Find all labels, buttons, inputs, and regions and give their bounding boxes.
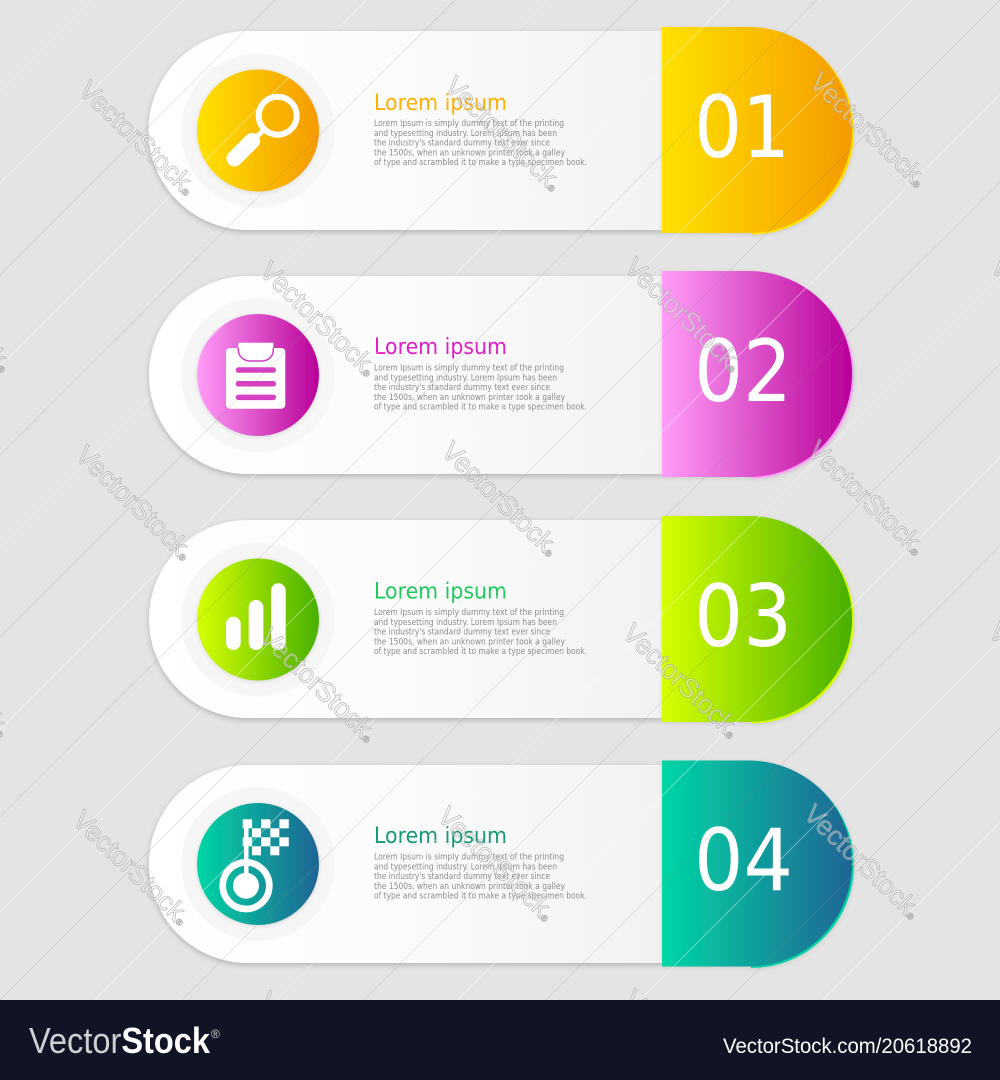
body text 04 [374, 852, 587, 902]
number 03: 03 [694, 567, 792, 667]
body text 03 [374, 608, 587, 657]
body text 02 [374, 364, 587, 412]
body text 03: of type and scrambled it to make a type specimen book. [374, 647, 587, 657]
watermark lines and stamps: VectorStock® [436, 436, 565, 562]
card 03 [149, 520, 662, 718]
panel: step 01 [149, 27, 854, 234]
watermark lines and stamps: VectorStock® [804, 67, 933, 193]
body text 04: the industry's standard dummy text ever since [374, 872, 550, 882]
panel: step 04 [149, 760, 854, 968]
icon disc 02 [197, 314, 319, 436]
icon disc 01 [197, 70, 319, 192]
icon disc 03 [197, 558, 319, 680]
body text 04: the 1500s, when an unknown printer took a galley [374, 882, 565, 892]
number 02: 02 [694, 322, 792, 422]
icon ring 01 [181, 54, 335, 208]
number 04: 04 [694, 811, 793, 911]
footer logo: VectorStock [29, 1020, 211, 1061]
body text 01: of type and scrambled it to make a type specimen book. [374, 158, 587, 168]
body text 01: Lorem Ipsum is simply dummy text of the printing [374, 119, 564, 129]
number 01: 01 [694, 78, 790, 178]
watermark lines and stamps: VectorStock® [70, 440, 199, 566]
body text 04: Lorem Ipsum is simply dummy text of the printing [374, 852, 564, 862]
icon: target with checkered flag [223, 819, 289, 909]
tab 01 [662, 27, 854, 234]
body text 03: the 1500s, when an unknown printer took a galley [374, 638, 565, 648]
body text 02: the 1500s, when an unknown printer took a galley [374, 393, 565, 403]
watermark lines and stamps: VectorStock® [802, 435, 931, 561]
body text 01: the industry's standard dummy text ever since [374, 138, 550, 148]
watermark lines and stamps: VectorStock® [73, 75, 202, 201]
card 02 [149, 276, 662, 474]
icon: bar chart [226, 583, 286, 650]
heading 04: Lorem ipsum [374, 824, 507, 849]
body text 04: and typesetting industry. Lorem Ipsum has been [374, 862, 557, 872]
watermark lines and stamps: VectorStock® [617, 618, 746, 744]
watermark lines and stamps: VectorStock® [67, 805, 196, 931]
body text 02: the industry's standard dummy text ever since [374, 383, 550, 393]
body text 01: the 1500s, when an unknown printer took a galley [374, 148, 565, 158]
body text 03: Lorem Ipsum is simply dummy text of the printing [374, 608, 564, 618]
footer image id: VectorStock.com/20618892 [723, 1035, 972, 1058]
body text 02: and typesetting industry. Lorem Ipsum has been [374, 374, 557, 384]
footer bar [0, 1000, 1000, 1080]
watermark lines and stamps: VectorStock® [254, 622, 383, 748]
body text 01 [374, 119, 587, 168]
icon disc 04 [197, 803, 319, 925]
heading 01: Lorem ipsum [374, 91, 507, 116]
icon ring 04 [181, 787, 335, 941]
tab 04 [662, 760, 854, 968]
footer registered mark: ® [211, 1027, 220, 1041]
icon: clipboard [226, 343, 285, 409]
body text 04: of type and scrambled it to make a type specimen book. [374, 892, 587, 902]
body text 03: and typesetting industry. Lorem Ipsum has been [374, 618, 557, 628]
card 04 [149, 765, 662, 963]
watermark lines and stamps: VectorStock® [798, 799, 927, 925]
body text 03: the industry's standard dummy text ever since [374, 628, 550, 638]
heading 02: Lorem ipsum [374, 335, 507, 360]
icon: magnifier [234, 97, 297, 158]
body text 02: of type and scrambled it to make a type specimen book. [374, 402, 587, 412]
tab 03 [662, 516, 854, 724]
tab 02 [662, 271, 854, 478]
watermark lines and stamps: VectorStock® [254, 256, 383, 382]
icon ring 02 [181, 298, 335, 452]
body text 02: Lorem Ipsum is simply dummy text of the printing [374, 364, 564, 374]
heading 03: Lorem ipsum [374, 580, 507, 604]
panel: step 02 [149, 271, 854, 478]
watermark lines and stamps: VectorStock® [432, 801, 561, 927]
card 01 [149, 31, 662, 230]
body text 01: and typesetting industry. Lorem Ipsum has been [374, 129, 557, 139]
icon ring 03 [181, 542, 335, 696]
panel: step 03 [149, 516, 854, 724]
watermark lines and stamps: VectorStock® [619, 252, 748, 378]
watermark lines and stamps: VectorStock® [439, 71, 568, 197]
